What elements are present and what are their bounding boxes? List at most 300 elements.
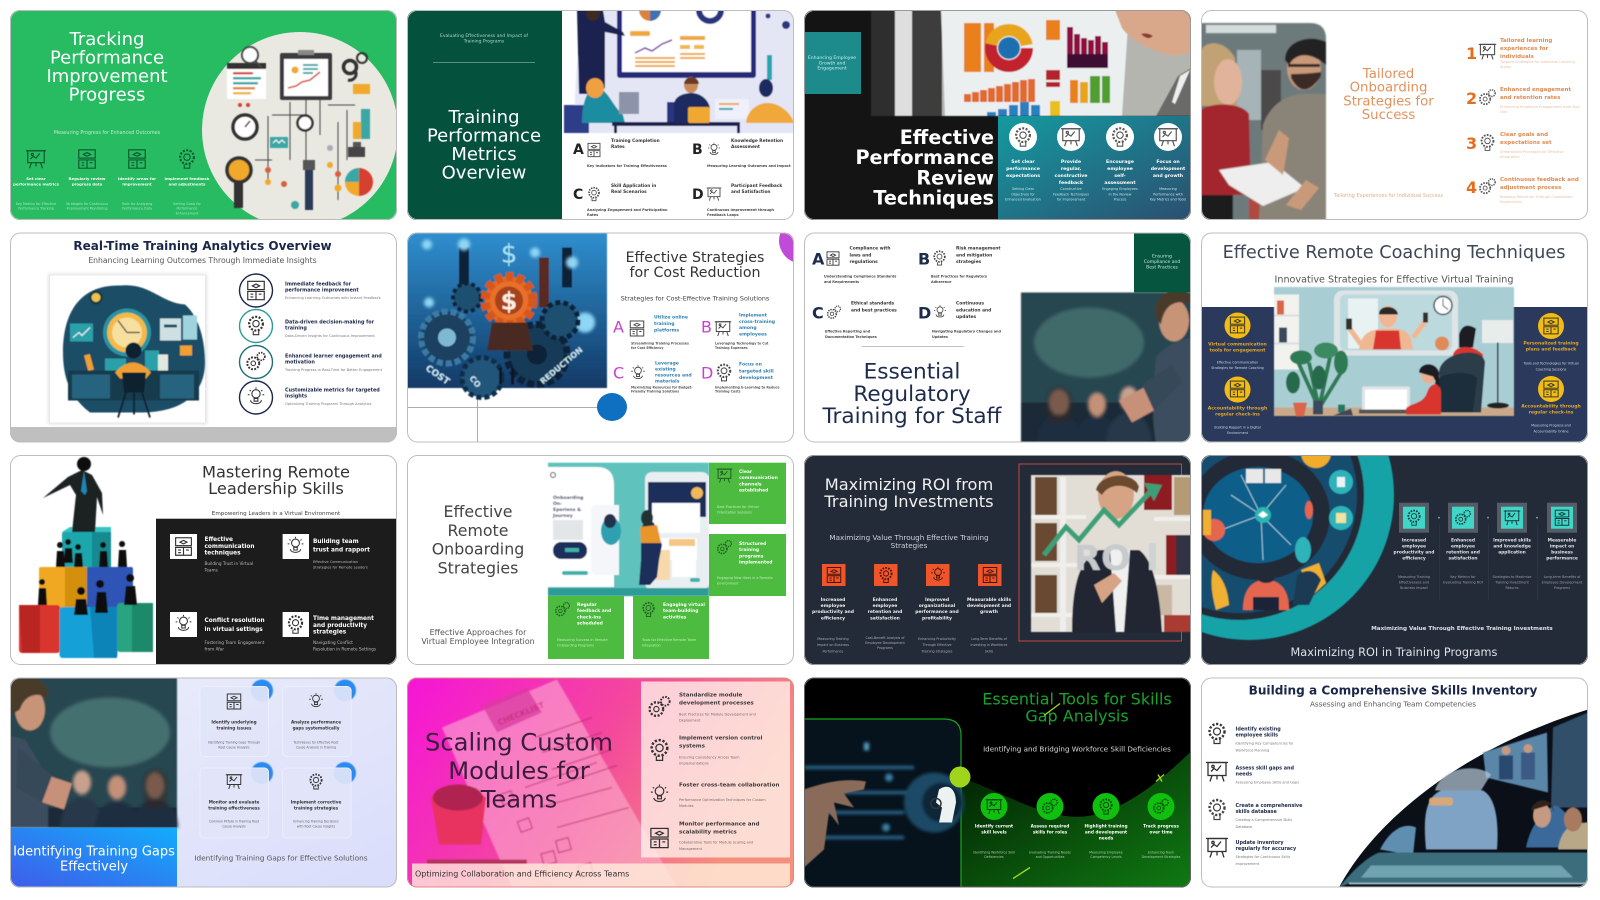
item 4: adjustment process [1500, 185, 1562, 191]
skill 1: techniques [204, 551, 241, 557]
item D: Feedback Loops [707, 213, 739, 217]
illustration: video coaching [1274, 287, 1514, 416]
strategy A: Streamlining Training Processes [631, 342, 689, 346]
tool 4: over time [1149, 830, 1173, 836]
item D: D [918, 304, 931, 322]
metric tile 2: Key Metrics for [1450, 575, 1476, 579]
card 2: Techniques for Effective Root [293, 740, 339, 744]
panel: Tracking Performance Improvement Progress [10, 10, 398, 228]
tile separators [1438, 517, 1538, 600]
left feature 2: regular check-ins [1215, 411, 1260, 417]
strategy C: Friendly Training Solutions [631, 390, 679, 394]
panel: Tailored Onboarding Strategies for Success [1201, 10, 1588, 220]
tagline: Maximizing Value Through Effective Training Investments [1371, 626, 1553, 632]
benefit list: Enhanced learner engagement and [285, 354, 382, 360]
card 2 [283, 686, 351, 756]
left feature 1: Effective Communication [1217, 360, 1258, 364]
tool 2 [1029, 793, 1071, 859]
metric labels: progress data [72, 181, 103, 186]
strategy D: Training Costs [715, 390, 741, 394]
metric tile 2: employee [1451, 544, 1475, 550]
tool 4: Enhancing Team [1148, 850, 1174, 854]
techniques panel: Engaging Employees [1102, 187, 1138, 191]
tool 1: skill levels [981, 830, 1007, 836]
skill 4 [283, 612, 376, 652]
item D: Participant Feedback [731, 183, 782, 189]
metric labels: and adjustments [169, 181, 206, 186]
metric tile 3: and knowledge [1493, 544, 1531, 550]
card 2: Analyze performance [291, 720, 341, 724]
strategy D: Implementing E-Learning to Reduce [715, 386, 780, 390]
metric tile 4: Employee Development [1542, 580, 1583, 584]
metric tile 2: Evaluating Training ROI [1443, 580, 1483, 584]
card: structured training programs: programs [739, 553, 764, 559]
left feature 2 [1208, 376, 1267, 435]
strategy A: Utilize online [654, 314, 688, 320]
techniques panel: self- [1114, 173, 1126, 179]
sidebar [407, 10, 562, 220]
benefit list [284, 282, 383, 406]
skill 1: Building Trust in Virtual [204, 561, 253, 566]
techniques panel: Key Metrics and Tools [1150, 198, 1186, 202]
card: structured training programs: implemented [739, 560, 772, 566]
benefit descriptions: Employee Development [865, 641, 905, 645]
metric tile 4: Programs [1554, 586, 1570, 590]
skill 4: Resolution in Remote Settings [313, 647, 376, 652]
metric tile 1: Effectiveness and [1399, 580, 1429, 584]
title box [10, 828, 177, 888]
list item 4: Management [679, 847, 703, 851]
title: Performance [427, 126, 541, 146]
item 1: Tailored Strategies for Individual Learning [1499, 60, 1575, 64]
title: Tailored [1362, 67, 1414, 82]
card: regular feedback [548, 596, 624, 659]
item 3: expectations set [1500, 140, 1552, 146]
metric labels [13, 178, 210, 186]
illustration: cost reduction gears [407, 232, 607, 398]
tool 2: Evaluating Training Needs [1029, 850, 1071, 854]
strategy A [613, 314, 689, 350]
list item 3: Modules [679, 804, 694, 808]
skill step 3 [1210, 800, 1303, 829]
item 2: One [1500, 110, 1508, 114]
techniques panel: Set clear [1011, 159, 1035, 165]
tool 1: Identify current [975, 824, 1013, 830]
card: virtual team-building: Tools for Effective Remote Team [641, 638, 697, 642]
item 4: Boosting Retention Through Customized [1500, 195, 1573, 199]
card: clear communication channels: communication [739, 475, 778, 481]
benefit labels: profitability [922, 615, 952, 621]
metric tile 2: retention and [1446, 550, 1480, 556]
title: Effective [444, 502, 512, 521]
tool 1 [973, 793, 1015, 859]
card 4: with Root Cause Insights [297, 824, 335, 828]
card: structured training programs: Structured [739, 541, 766, 547]
metric descriptions: Improvement Monitoring [67, 207, 107, 211]
lime accent strokes [1013, 704, 1164, 878]
title: Teams [480, 786, 557, 814]
item B: Best Practices for Regulatory [931, 274, 988, 278]
item A: laws and [850, 252, 871, 258]
metric descriptions: Setting Goals for [173, 202, 201, 206]
photo: man holding ROI letters [1031, 471, 1191, 632]
strategy B: Leveraging Technology to Cut [715, 342, 769, 346]
title: Modules for [448, 757, 590, 785]
benefit labels: retention and [868, 609, 902, 615]
item C: Real Scenarios [611, 189, 647, 195]
benefit labels: Increased [821, 597, 845, 603]
item 4 [1466, 177, 1579, 204]
benefit list: Enhancing Learning Outcomes with Instant Feedback [285, 296, 382, 300]
title: Strategies for [1343, 94, 1434, 109]
skill 1: Teams [204, 568, 218, 573]
strategy B: among [739, 326, 757, 331]
card: structured training programs: Environment [717, 581, 739, 585]
skill 3: Conflict resolution [204, 618, 265, 624]
metric labels: Implement feedback [164, 176, 210, 181]
item C: C [573, 187, 583, 203]
tool 1: Identifying Workforce Skill [973, 850, 1015, 854]
photo frame [1019, 464, 1182, 641]
list item 3 [651, 782, 779, 808]
panel: Effective Strategies for Cost Reduction [407, 232, 794, 442]
strategy D: targeted skill [739, 368, 774, 374]
illustration: cost reduction gears: $ [501, 288, 517, 316]
strategy C: existing [655, 366, 676, 372]
item C: Effective Reporting and [825, 330, 871, 334]
panel: Training Performance Metrics Overview [407, 0, 794, 220]
left feature 1: tools for engagement [1210, 347, 1266, 353]
benefit labels: Improved [925, 597, 949, 603]
benefit labels: organizational [919, 603, 956, 609]
item C [812, 300, 897, 339]
tool 4: Development Strategies [1142, 855, 1181, 859]
benefit labels [812, 597, 1011, 621]
card 1 [200, 686, 268, 756]
item C [573, 183, 668, 217]
strategy C: Leverage [655, 360, 679, 366]
list item 2: Implement version control [679, 736, 762, 742]
tool 3: needs [1099, 836, 1114, 842]
title: Regulatory [853, 382, 971, 407]
dark skills panel [156, 519, 397, 666]
right feature 2: Accountability through [1521, 404, 1581, 410]
techniques panel: expectations [1006, 173, 1040, 179]
item D: and Satisfaction [731, 189, 770, 195]
metric descriptions: Enhancement [176, 211, 199, 215]
benefit descriptions: Measuring Training [817, 637, 849, 641]
item 2: 2 [1466, 89, 1477, 108]
techniques panel: Constructive [1060, 187, 1082, 191]
metric tile 2: satisfaction [1448, 556, 1478, 562]
subtitle: Identifying Training Gaps for Effective Solutions [194, 854, 368, 862]
card: regular feedback: feedback and [577, 608, 611, 614]
metric labels: performance metrics [13, 181, 60, 186]
card: clear communication channels: Best Practices for Virtual [717, 505, 759, 509]
card 4: Enhancing Training Decisions [293, 820, 339, 824]
card: virtual team-building: team-building [663, 608, 698, 614]
subtitle: Measuring Progress for Enhanced Outcomes [54, 130, 161, 136]
tool 3: and development [1085, 830, 1127, 836]
background: checklist photo [427, 680, 677, 888]
metric descriptions [16, 202, 201, 214]
techniques panel [998, 116, 1191, 220]
item A [812, 246, 896, 284]
illustration: cost reduction gears: $ [501, 240, 517, 270]
skill 3 [170, 612, 265, 652]
title: Mastering Remote [202, 462, 350, 482]
panel: Essential Regulatory Training for Staff [804, 232, 1191, 442]
panel: Real-Time Training Analytics Overview [10, 232, 397, 443]
item 3 [1466, 132, 1564, 159]
item A: A [573, 142, 584, 158]
photo: team at holographic table [1339, 710, 1588, 888]
left feature 1 [1208, 312, 1267, 370]
strategy C: resources and [655, 372, 692, 378]
sidebar caption: Training Programs [463, 39, 505, 45]
title: Gap Analysis [1025, 706, 1129, 726]
photo: woman viewing dashboard [871, 10, 1191, 116]
list item 3: Foster cross-team collaboration [679, 782, 779, 788]
metric labels: improvement [122, 181, 152, 186]
benefit labels: development and [967, 603, 1011, 609]
metric descriptions: Tools for Analyzing [121, 202, 152, 206]
metric tile 1 [1394, 503, 1434, 590]
metric descriptions: Performance [177, 207, 197, 211]
item A [573, 138, 667, 168]
card: regular feedback: Regular [577, 602, 598, 608]
left feature 1: Virtual communication [1208, 342, 1267, 348]
item 4: Continuous feedback and [1500, 177, 1579, 183]
skill step 4: Improvement [1236, 862, 1260, 866]
item A: Understanding Compliance Standards [824, 274, 896, 278]
metric labels: Set clear [26, 176, 46, 181]
item B: Adherence [931, 280, 952, 284]
tool 3: Highlight training [1084, 824, 1128, 830]
subtitle: Strategies [891, 541, 928, 550]
skill 4: strategies [313, 630, 347, 636]
benefit descriptions: Cost-Benefit Analysis of [865, 636, 905, 640]
metric descriptions: Strategies for Continuous [66, 202, 108, 206]
title: Effective Remote Coaching Techniques [1223, 243, 1565, 263]
title: Onboarding [432, 540, 524, 559]
item B [692, 138, 791, 168]
card: virtual team-building: activities [663, 614, 687, 620]
item D: updates [956, 314, 976, 320]
tool 3: Competency Levels [1090, 855, 1122, 859]
metric descriptions: Performance Data [122, 207, 152, 211]
panel: Maximizing ROI from Training Investments [804, 455, 1191, 665]
illustration: performance tools circle [202, 32, 398, 228]
photo: man holding ROI letters: RO [1074, 539, 1131, 579]
list item 2: Implementations [679, 762, 709, 766]
metric tile 3 [1493, 503, 1531, 590]
item 1: experiences for [1500, 46, 1549, 52]
skill step 2: Assess skill gaps and [1236, 766, 1295, 772]
item D [918, 300, 1001, 339]
title: Effectively [60, 860, 128, 874]
card: structured training programs: Engaging New Hires in a Remote [717, 576, 773, 580]
badge text: Ensuring [1152, 254, 1172, 260]
illustration: cost reduction gears: REDUCTION [539, 345, 585, 386]
techniques panel: Performance with [1153, 192, 1183, 196]
benefit labels: Measurable skills [967, 597, 1011, 603]
metric tile 3: Returns [1505, 586, 1519, 590]
badge text: Best Practices [1146, 264, 1179, 270]
illustration: onboarding app [548, 463, 709, 596]
metric tile 3: Training Investment [1494, 580, 1529, 584]
benefit descriptions [817, 636, 1008, 653]
skill 1 [170, 534, 254, 573]
techniques panel: for Improvement [1057, 198, 1086, 202]
magenta corner [779, 232, 794, 262]
illustration: cost reduction gears: COST [423, 364, 452, 388]
item A: Compliance with [850, 246, 890, 252]
card 1: Root Cause Analysis [218, 746, 250, 750]
right feature 2: regular check-ins [1529, 410, 1574, 416]
item B: strategies [956, 259, 982, 265]
metric tile 4 [1542, 503, 1583, 590]
item C: Ethical standards [851, 300, 895, 306]
metric labels: Identify areas for [118, 176, 156, 181]
tool 1: Deficiencies [984, 855, 1004, 859]
techniques panel: feedback [1059, 180, 1084, 186]
item 3: Clear goals and [1500, 132, 1548, 138]
subtitle: Effective Approaches for [430, 628, 527, 637]
illustration: cost reduction gears: CO [467, 374, 483, 390]
benefit descriptions: Training Strategies [921, 649, 953, 653]
illustration: analytics desk [48, 274, 207, 424]
strategy B: employees [739, 331, 767, 337]
item 2: Enhancing Employee Engagement from Day [1500, 105, 1580, 109]
caption: Growth and [819, 60, 845, 66]
card: clear communication channels: established [739, 488, 768, 494]
subtitle: Tailoring Experiences for Individual Success [1333, 193, 1443, 199]
item D [692, 183, 782, 217]
card: clear communication channels: channels [739, 481, 762, 487]
title: Training for Staff [822, 404, 1003, 429]
benefit descriptions: Skills [985, 649, 994, 653]
strategy C: C [613, 364, 624, 382]
metric tile 3: Strategies to Maximize [1493, 575, 1531, 579]
title: Metrics [451, 144, 517, 165]
strategy A: training [654, 321, 675, 327]
title: Improvement [46, 66, 168, 87]
tool 2: skills for roles [1033, 830, 1068, 836]
item 1 [1466, 38, 1575, 69]
decorative blue dots [251, 680, 356, 784]
subtitle: Empowering Leaders in a Virtual Environment [212, 511, 341, 517]
footer band [412, 864, 790, 888]
strategy C [613, 360, 693, 394]
item 3: 3 [1466, 134, 1477, 153]
right feature 2: Measuring Progress and [1531, 424, 1571, 428]
list item 1: Deployment [679, 718, 701, 722]
left feature 2: Building Rapport in a Digital [1214, 426, 1261, 430]
item A: A [812, 250, 825, 268]
card: virtual team-building: Engaging virtual [663, 602, 705, 608]
skill step 4 [1206, 838, 1297, 866]
list item 1: Standardize module [679, 692, 742, 698]
title: for Cost Reduction [630, 265, 760, 281]
panel: Mastering Remote Leadership Skills [10, 455, 397, 666]
metric tile 2: Enhanced [1451, 538, 1475, 544]
techniques panel: in the Review [1109, 192, 1132, 196]
card: clear communication channels: Orientation Sessions [717, 510, 752, 514]
subtitle: Identifying and Bridging Workforce Skill Deficiencies [983, 744, 1171, 754]
tool 4 [1142, 793, 1181, 859]
item D: Continuous Improvement through [707, 208, 774, 212]
left feature 2: Environment [1227, 431, 1249, 435]
panel: Effective Remote Coaching Techniques [1201, 232, 1588, 443]
card: regular feedback: Measuring Success in Remote [557, 638, 608, 642]
caption: Engagement [817, 66, 847, 72]
strategy B: B [701, 318, 712, 336]
skill 4: Navigating Conflict [313, 640, 353, 645]
subtitle: Strategies for Cost-Effective Training Solutions [621, 294, 770, 302]
benefit descriptions: Long-Term Benefits of [971, 637, 1008, 641]
item C: Skill Application in [611, 183, 656, 189]
card 1: Identifying Training Gaps Through [208, 740, 260, 744]
card: regular feedback: Onboarding Programs [557, 644, 594, 648]
benefit descriptions: Programs [877, 646, 893, 650]
panel: Maximizing ROI in Training Programs [1104, 350, 1588, 665]
illustration: concentric learning circle [1104, 350, 1394, 640]
techniques panel: Process [1114, 198, 1127, 202]
strategy A: A [613, 318, 624, 336]
card 1: training issues [217, 726, 252, 730]
list item 3: Performance Optimization Techniques for Custom [679, 798, 766, 802]
list item 4: Monitor performance and [679, 822, 760, 828]
benefit descriptions: Impact on Business [817, 643, 849, 647]
title: Maximizing ROI in Training Programs [1291, 646, 1498, 659]
blue circle [597, 393, 627, 421]
benefit labels: employee [873, 603, 897, 609]
skill 2: Strategies for Remote Leaders [313, 565, 368, 569]
strategy D [701, 362, 780, 394]
orange icon tiles [822, 564, 1002, 586]
item 1: 1 [1466, 44, 1477, 63]
item 2 [1466, 87, 1580, 114]
benefit descriptions: Investing in Workforce [971, 643, 1007, 647]
list item 2: systems [679, 744, 706, 750]
metric tile 1: productivity and [1394, 550, 1434, 556]
benefit labels: satisfaction [870, 615, 900, 621]
benefit descriptions: Enhancing Productivity [918, 637, 956, 641]
techniques panel: performance [1006, 166, 1040, 172]
panel: Effective Remote Onboarding Strategies [407, 455, 794, 665]
title: Techniques [873, 187, 994, 210]
metric tile 4: Long-term Benefits of [1544, 575, 1581, 579]
item A: and Requirements [824, 280, 859, 284]
title: Identifying Training Gaps [13, 844, 175, 860]
skill 3: in virtual settings [204, 627, 263, 633]
item C: Analyzing Engagement and Participation [587, 208, 668, 212]
skill step 2: needs [1236, 771, 1252, 777]
card 4 [283, 768, 351, 838]
skill step 1: employee skills [1236, 732, 1278, 738]
metric tile 1: efficiency [1402, 556, 1426, 562]
translucent list panel [641, 682, 790, 858]
subtitle: Assessing and Enhancing Team Competencies [1310, 700, 1476, 708]
skill step 1 [1210, 724, 1294, 752]
right feature 1: Tools and Technologies for Virtual [1522, 362, 1579, 366]
list item 4 [651, 822, 760, 851]
benefit list: Customizable metrics for targeted [285, 388, 380, 394]
card: clear communication channels: Clear [739, 469, 753, 475]
title: Training [447, 107, 520, 128]
item C: C [812, 304, 824, 322]
